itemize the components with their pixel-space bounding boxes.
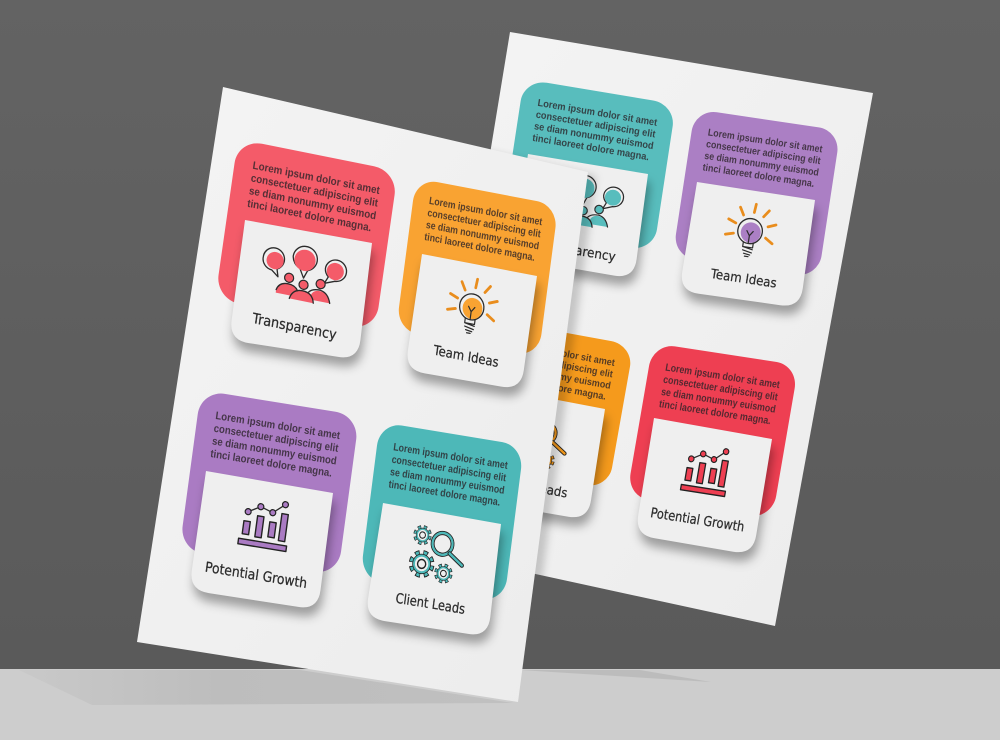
floor — [0, 669, 1000, 740]
body text: consectetuer adipiscing elit — [535, 110, 657, 141]
white panel — [515, 154, 648, 276]
colour panel — [673, 109, 841, 278]
body text: se diam nonummy euismod — [493, 360, 612, 392]
body text: tinci laoreet dolore magna. — [210, 448, 333, 480]
card content — [373, 442, 509, 622]
card: back Client Leads — [459, 318, 634, 526]
card: front Client Leads — [360, 422, 524, 643]
white panel — [408, 254, 537, 387]
panel shadow — [640, 427, 774, 561]
body text: tinci laoreet dolore magna. — [532, 133, 650, 163]
label: Client Leads — [395, 591, 466, 618]
white panel — [638, 418, 772, 552]
label: Client Leads — [495, 474, 569, 502]
back sheet paper — [425, 32, 873, 626]
floor shadow of front sheet — [19, 670, 513, 705]
body text — [246, 160, 381, 235]
icon: light bulb — [445, 274, 500, 338]
colour panel — [396, 178, 558, 357]
body text: se diam nonummy euismod — [533, 121, 654, 152]
body text: tinci laoreet dolore magna. — [702, 162, 815, 190]
body text: tinci laoreet dolore magna. — [658, 399, 772, 427]
body text: consectetuer adipiscing elit — [391, 454, 507, 485]
body text — [702, 127, 824, 191]
card content — [194, 410, 341, 594]
card: front Potential Growth — [179, 390, 359, 616]
body text: Lorem ipsum dolor sit amet — [215, 410, 341, 442]
card: back Team Ideas — [673, 109, 841, 315]
icon: bar chart — [238, 495, 292, 552]
panel shadow — [684, 191, 817, 315]
body text: se diam nonummy euismod — [389, 467, 505, 497]
card content — [516, 98, 658, 269]
body text: se diam nonummy euismod — [211, 435, 337, 468]
floor shadow of back sheet — [520, 670, 711, 682]
icon: gears and magnifier — [410, 526, 466, 584]
panel shadow — [193, 480, 335, 616]
white panel — [368, 503, 501, 634]
icon: light bulb — [723, 200, 779, 260]
body text: tinci laoreet dolore magna. — [424, 232, 536, 264]
label: Team Ideas — [432, 343, 500, 371]
body text — [210, 410, 341, 480]
body text — [658, 362, 781, 428]
card content — [409, 196, 543, 376]
icon: bar chart — [680, 443, 733, 497]
body text: consectetuer adipiscing elit — [495, 348, 614, 381]
card: back Potential Growth — [627, 343, 799, 561]
icon: people with speech bubbles — [540, 169, 626, 232]
label: Transparency — [534, 237, 617, 265]
colour panel — [502, 79, 676, 251]
body text — [424, 196, 543, 265]
card: front Team Ideas — [396, 178, 558, 396]
body text: consectetuer adipiscing elit — [427, 208, 542, 241]
front sheet — [137, 87, 588, 702]
white panel — [682, 182, 815, 306]
body text: se diam nonummy euismod — [248, 185, 377, 222]
panel shadow — [475, 396, 607, 526]
colour panel — [179, 390, 359, 576]
icon: gears and magnifier — [511, 415, 570, 471]
card: front Transparency — [215, 139, 398, 366]
label: Team Ideas — [709, 267, 778, 292]
body text: Lorem ipsum dolor sit amet — [497, 337, 616, 369]
panel shadow — [370, 512, 503, 643]
body text: consectetuer adipiscing elit — [705, 139, 822, 167]
body text: consectetuer adipiscing elit — [250, 172, 379, 210]
body text: se diam nonummy euismod — [704, 151, 820, 179]
body text: se diam nonummy euismod — [660, 387, 776, 416]
card content — [686, 127, 824, 296]
body text: tinci laoreet dolore magna. — [388, 479, 501, 509]
colour panel — [459, 318, 634, 489]
body text — [388, 442, 509, 509]
body text: consectetuer adipiscing elit — [662, 375, 779, 404]
body text: Lorem ipsum dolor sit amet — [252, 160, 381, 197]
colour panel — [627, 343, 799, 519]
label: Potential Growth — [649, 506, 745, 536]
white panel — [231, 220, 372, 357]
body text: Lorem ipsum dolor sit amet — [428, 196, 543, 229]
body text: Lorem ipsum dolor sit amet — [664, 362, 781, 391]
body text: Lorem ipsum dolor sit amet — [707, 127, 824, 156]
body text: consectetuer adipiscing elit — [213, 423, 339, 455]
body text — [532, 98, 658, 164]
body text: tinci laoreet dolore magna. — [246, 198, 372, 234]
colour panel — [360, 422, 524, 602]
back sheet — [425, 32, 873, 626]
card content — [230, 160, 381, 348]
panel shadow — [517, 163, 650, 285]
body text: Lorem ipsum dolor sit amet — [537, 98, 658, 129]
body text — [491, 337, 616, 403]
front sheet paper — [137, 87, 588, 702]
panel shadow — [410, 263, 539, 396]
body text: se diam nonummy euismod — [425, 220, 540, 253]
card content — [473, 337, 616, 506]
white panel — [473, 387, 605, 517]
card content — [639, 362, 781, 537]
icon: people with speech bubbles — [258, 238, 349, 309]
shadow of front sheet on back sheet — [491, 148, 598, 576]
body text: tinci laoreet dolore magna. — [491, 371, 607, 403]
label: Potential Growth — [204, 559, 308, 592]
colour panel — [215, 139, 398, 331]
body text: Lorem ipsum dolor sit amet — [393, 442, 509, 472]
panel shadow — [233, 229, 374, 366]
card: back Transparency — [502, 79, 676, 285]
white panel — [191, 471, 333, 607]
label: Transparency — [250, 311, 338, 344]
